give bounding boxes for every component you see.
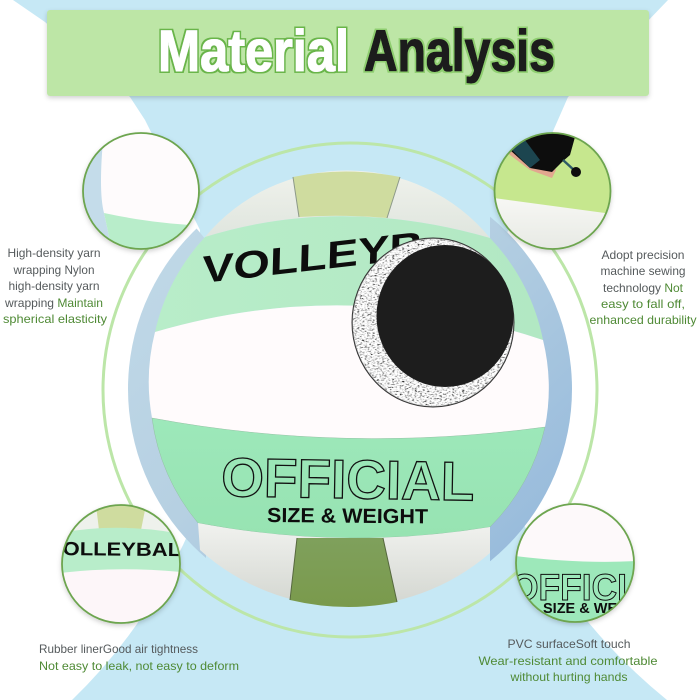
- title word: Analysis: Analysis: [364, 19, 555, 84]
- title banner: [47, 10, 649, 96]
- text block: PVC surface: PVC surfaceSoft touch: [508, 637, 630, 651]
- lower green band: [152, 418, 545, 538]
- top panels: [205, 170, 490, 238]
- detail circle: yarn wrapping: [80, 130, 205, 255]
- top green band: [155, 216, 543, 340]
- detail circle: rubber liner: VOLLEYBAL: [48, 539, 182, 561]
- text block: yarn wrapping: high-density yarn: [8, 279, 100, 293]
- detail circle: PVC surface: SIZE & WEIGHT: [543, 601, 652, 617]
- text block: PVC surface: without hurting hands: [509, 670, 628, 684]
- bottom panels: [198, 523, 490, 607]
- text block: yarn wrapping: High-density yarn: [8, 246, 100, 260]
- detail circle: PVC surface: OFFICI: [511, 567, 627, 608]
- text block: yarn wrapping: wrapping Maintain: [4, 296, 103, 310]
- text block: yarn wrapping: [3, 246, 107, 326]
- middle white band: [149, 305, 549, 439]
- text block: machine sewing: technology Not: [603, 281, 684, 295]
- text block: rubber liner: Rubber linerGood air tightness: [39, 642, 198, 656]
- text block: yarn wrapping: wrapping Nylon: [13, 263, 94, 277]
- title word: Material: Material: [158, 19, 349, 84]
- text block: machine sewing: [590, 248, 696, 327]
- text block: machine sewing: enhanced durability: [590, 313, 696, 327]
- valve disc: [352, 238, 514, 407]
- text block: PVC surface: [478, 637, 658, 684]
- ball blue rim: [128, 217, 572, 562]
- decorative large ring: [103, 143, 597, 637]
- detail circle: rubber liner: [48, 503, 182, 625]
- volleyball: [128, 167, 572, 611]
- detail circle: machine sewing: [490, 130, 615, 255]
- detail circle: PVC surface: [513, 503, 637, 627]
- OFFICIAL outlined print: OFFICIAL: [221, 446, 475, 512]
- SIZE & WEIGHT print: SIZE & WEIGHT: [267, 504, 429, 528]
- text block: machine sewing: easy to fall off,: [601, 297, 685, 311]
- text block: PVC surface: Wear-resistant and comfortable: [478, 654, 658, 668]
- text block: yarn wrapping: spherical elasticity: [3, 312, 107, 326]
- text block: rubber liner: [39, 642, 239, 673]
- VOLLEYBALL print: VOLLEYB: [202, 224, 423, 292]
- text block: machine sewing: machine sewing: [600, 264, 686, 278]
- text block: machine sewing: Adopt precision: [602, 248, 684, 262]
- text block: rubber liner: Not easy to leak, not easy to deform: [39, 659, 239, 673]
